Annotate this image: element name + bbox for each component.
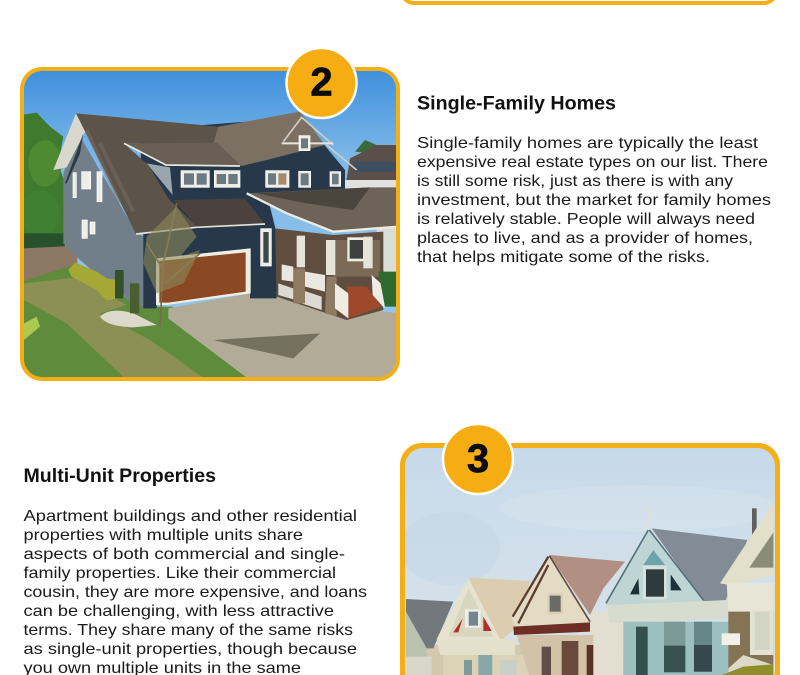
text block: multi-unit description: Apartment buildings and other residential bbox=[24, 508, 357, 525]
number badge 2 bbox=[286, 48, 356, 118]
text block: multi-unit description: aspects of both commercial and single- bbox=[24, 546, 345, 563]
cream house bbox=[468, 578, 530, 642]
neighbouring house bbox=[346, 145, 396, 180]
grey house at far left bbox=[406, 599, 453, 648]
heading: Multi-Unit Properties: Multi-Unit Properties bbox=[24, 466, 216, 487]
photo: suburban house bbox=[20, 67, 400, 380]
text block: multi-unit description: cousin, they are more expensive, and loans bbox=[24, 584, 367, 601]
heading: Single-Family Homes: Single-Family Homes bbox=[417, 94, 616, 114]
text block: single-family description: places to live, and as a provider of homes, bbox=[417, 230, 753, 247]
number badge 3 bbox=[443, 424, 513, 494]
panel: multi-unit properties photo bbox=[400, 443, 780, 675]
text block: single-family description bbox=[417, 135, 771, 266]
text block: multi-unit description: family properties. Like their commercial bbox=[24, 565, 336, 582]
text block: multi-unit description: terms. They share many of the same risks bbox=[24, 622, 353, 639]
blue-green house bbox=[652, 528, 747, 602]
text block: multi-unit description bbox=[24, 508, 367, 675]
number badge 2: 2 bbox=[310, 60, 333, 104]
panel: single-family homes photo bbox=[20, 67, 400, 381]
dark front walls bbox=[140, 117, 345, 308]
porch bbox=[275, 228, 383, 320]
text block: multi-unit description: as single-unit properties, though because bbox=[24, 641, 357, 658]
small tree bbox=[147, 203, 200, 327]
tan gabled house bbox=[549, 555, 625, 615]
text block: single-family description: is still some risk, just as there is with any bbox=[417, 173, 733, 190]
main roof bbox=[76, 113, 218, 234]
text block: single-family description: is relatively stable. People will always need bbox=[417, 211, 755, 228]
panel: previous card edge bbox=[402, 0, 776, 3]
text block: single-family description: expensive real estate types on our list. There bbox=[417, 154, 768, 171]
text block: single-family description: that helps mitigate some of the risks. bbox=[417, 249, 710, 266]
bushes bbox=[68, 262, 125, 301]
cream house at far right bbox=[752, 508, 757, 535]
number badge 3: 3 bbox=[467, 437, 489, 481]
text block: multi-unit description: properties with multiple units share bbox=[24, 527, 303, 544]
text block: single-family description: Single-family homes are typically the least bbox=[417, 135, 759, 152]
text block: multi-unit description: can be challenging, with less attractive bbox=[24, 603, 334, 620]
row backing bbox=[406, 645, 773, 675]
text block: single-family description: investment, but the market for family homes bbox=[417, 192, 771, 209]
photo: row of Victorian houses bbox=[400, 445, 780, 675]
side wall bbox=[63, 133, 144, 308]
windows bbox=[73, 136, 341, 266]
garage door bbox=[156, 248, 251, 305]
